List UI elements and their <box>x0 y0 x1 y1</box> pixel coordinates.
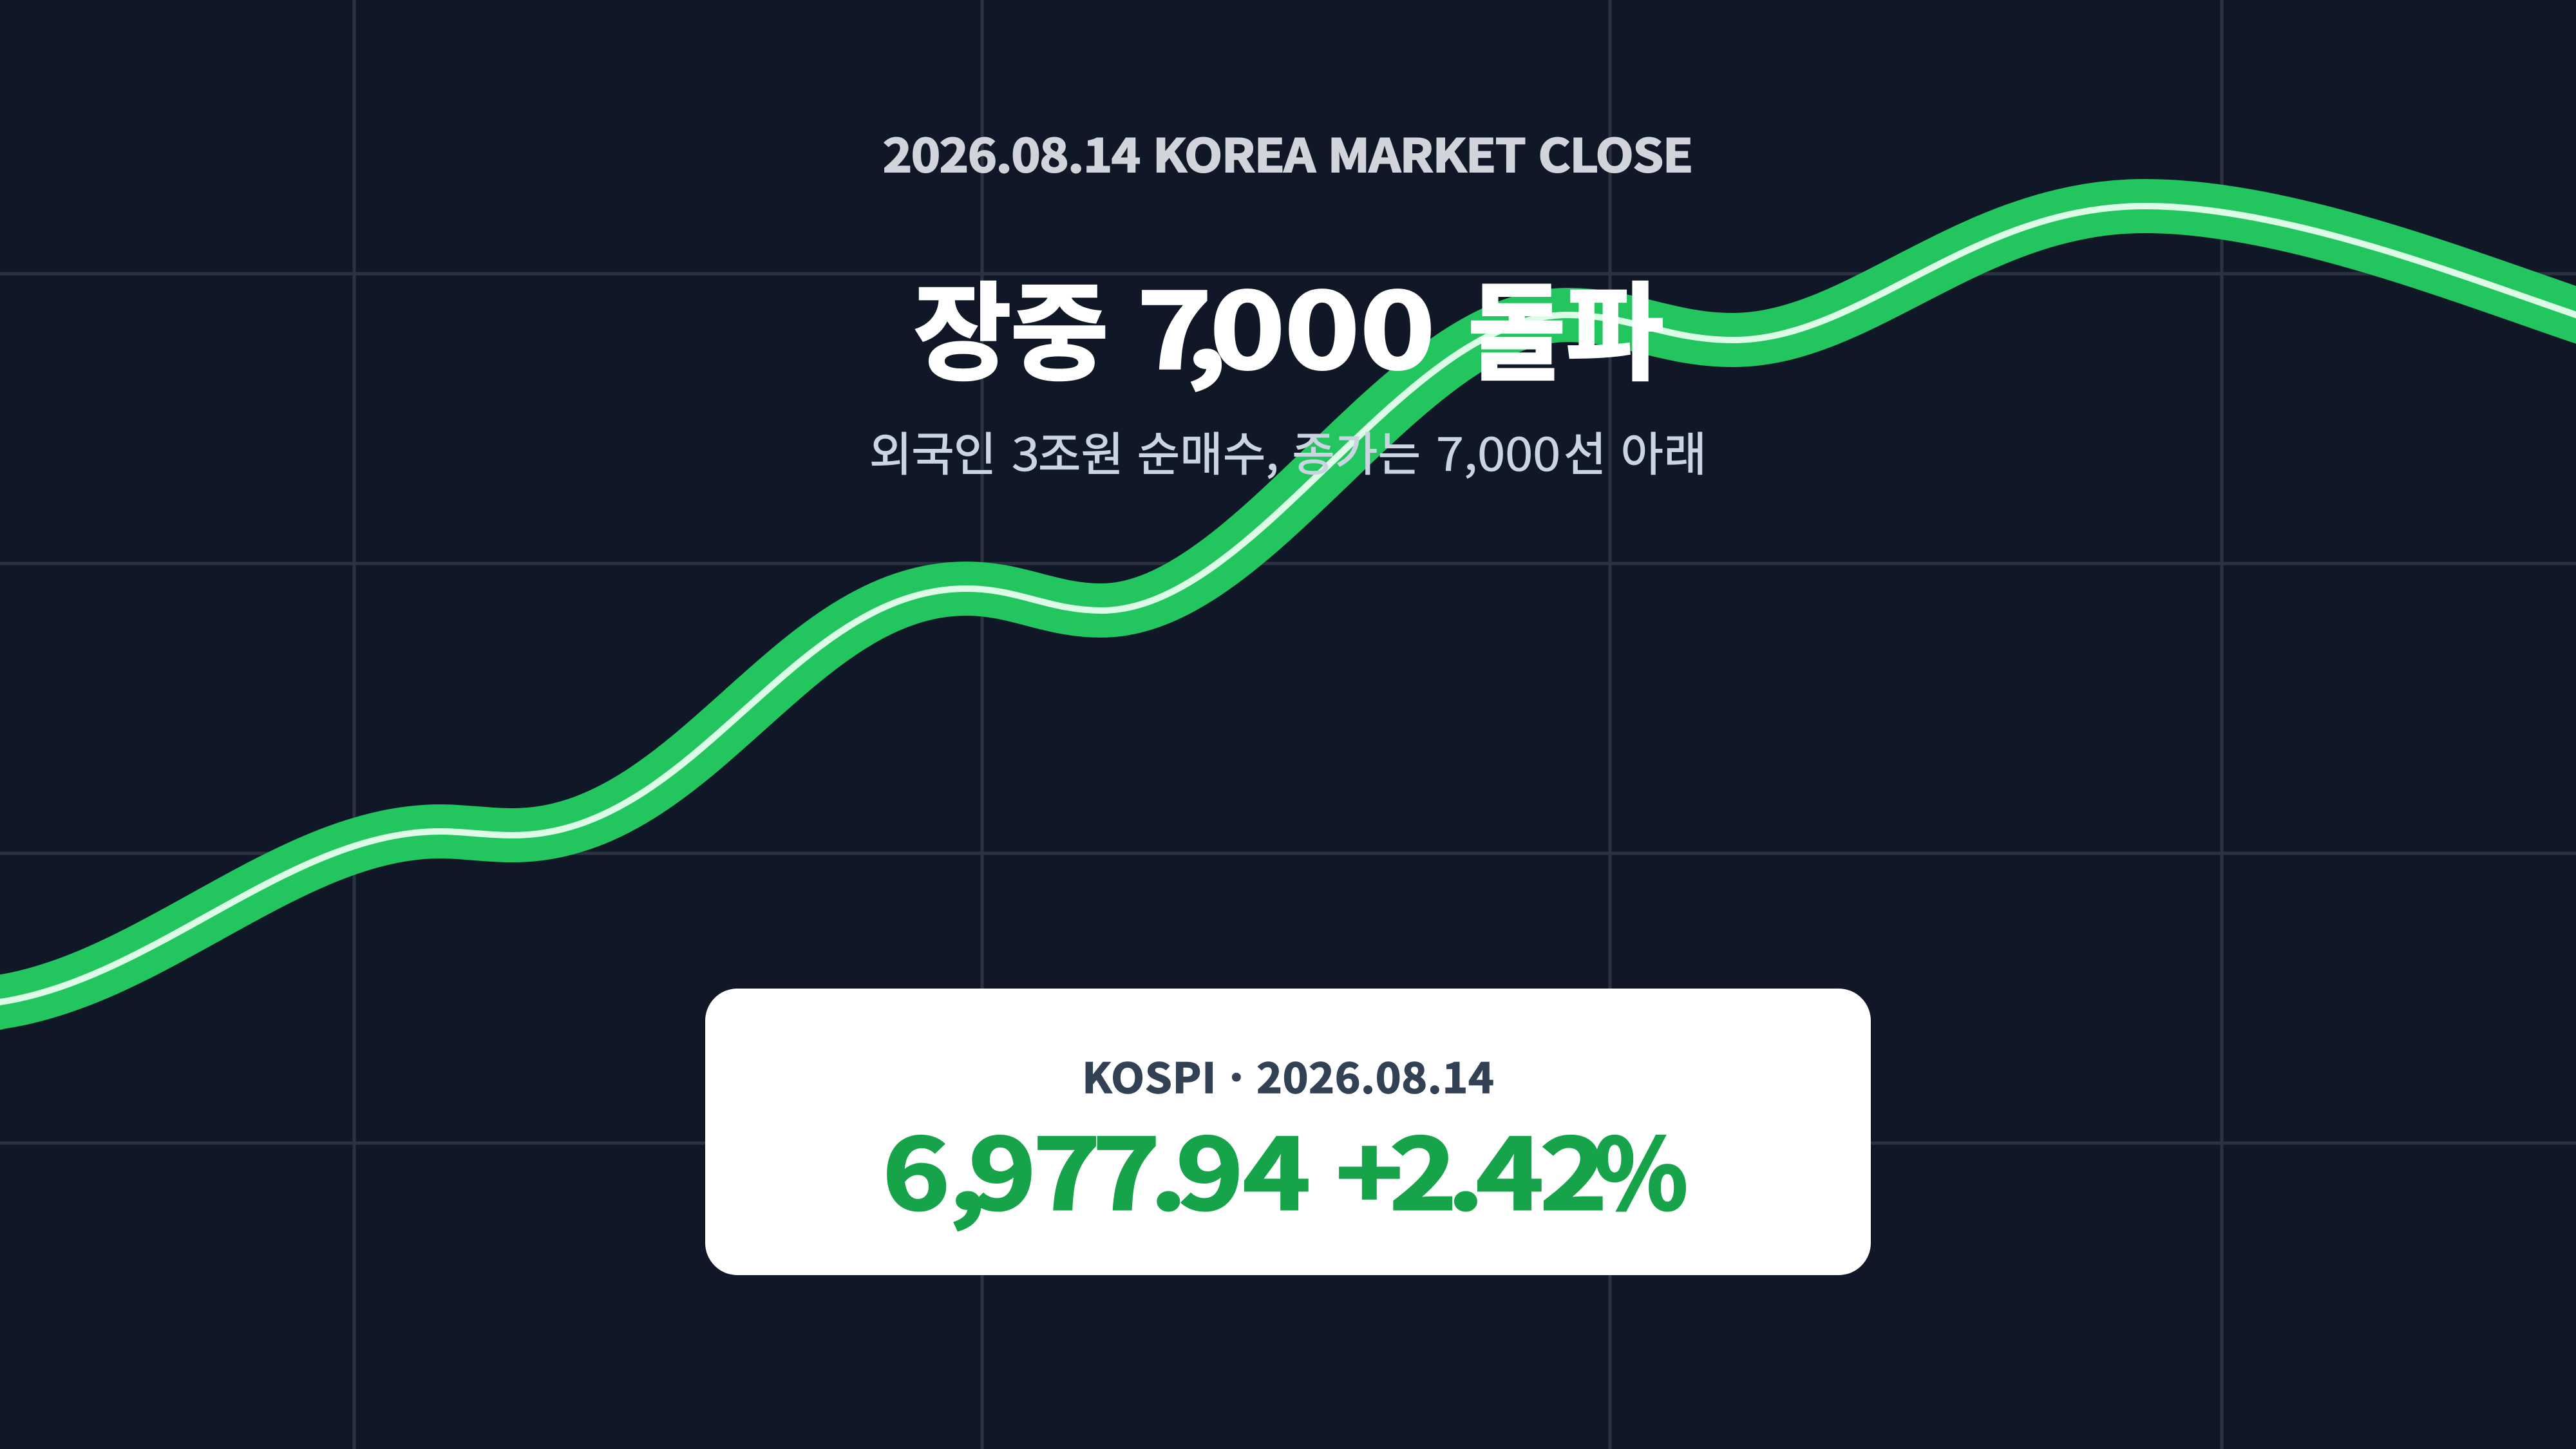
trend line: light centre stroke <box>0 206 2576 1016</box>
subheading: 조원 순매수, 종가는 <box>1038 417 1421 484</box>
date and market eyebrow: 2026.08.14 KOREA MARKET CLOSE <box>883 119 1693 185</box>
subheading: 7,000 <box>1436 418 1560 484</box>
card panel <box>705 989 1871 1275</box>
trend line: green band <box>0 206 2576 1016</box>
headline: 7,000: 7,000 <box>1137 248 1435 399</box>
subheading: 선 아래 <box>1564 417 1707 484</box>
card label: KOSPI · 2026.08.14 <box>1082 1045 1494 1105</box>
closing value and change: 6,977.94 +2.42 <box>882 1096 1607 1238</box>
headline: 장중: 장중 <box>913 247 1109 402</box>
KOSPI trend line <box>0 206 2576 1016</box>
closing value and change: % <box>1594 1096 1688 1238</box>
headline: 돌파: 돌파 <box>1468 247 1664 402</box>
headline <box>913 247 1664 402</box>
KOSPI result card <box>705 989 1871 1275</box>
subheading <box>869 417 1707 484</box>
subheading: 외국인 <box>869 417 996 484</box>
subheading: 3 <box>1012 418 1039 484</box>
